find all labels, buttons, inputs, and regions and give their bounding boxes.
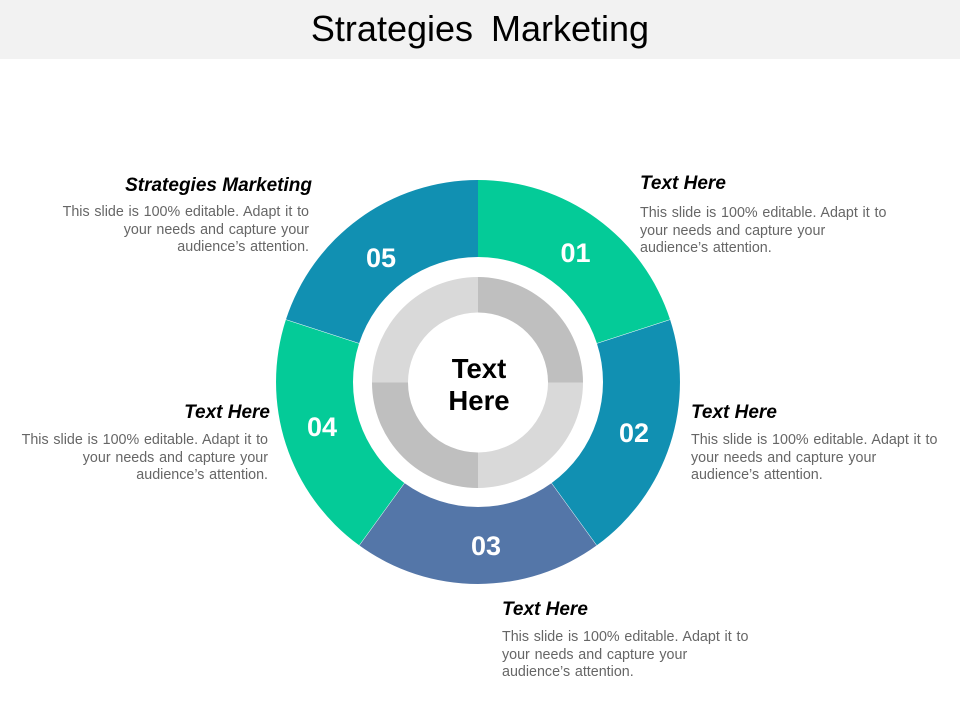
segment 01 xyxy=(478,180,670,343)
center label: Text xyxy=(452,353,506,384)
text block 03: audience’s attention. xyxy=(502,664,634,680)
text block 01 xyxy=(640,173,886,256)
inner ring xyxy=(372,277,583,488)
center label: Here xyxy=(448,385,510,416)
text block 01: audience’s attention. xyxy=(640,240,772,256)
text block 03 xyxy=(502,599,748,680)
text block 03: your needs and capture your xyxy=(502,647,687,663)
text block 02: Text Here xyxy=(691,402,777,423)
text block 05 xyxy=(62,175,312,255)
segment 03: 03 xyxy=(471,531,501,561)
segment 04: 04 xyxy=(307,412,337,442)
segment 05 xyxy=(286,180,478,343)
text block 05: your needs and capture your xyxy=(124,222,309,238)
segment 01: 01 xyxy=(560,238,591,268)
text block 05: audience’s attention. xyxy=(177,239,309,255)
segment 02: 02 xyxy=(619,418,649,448)
text block 02: your needs and capture your xyxy=(691,450,876,466)
text block 04: your needs and capture your xyxy=(83,450,268,466)
segment 04 xyxy=(276,320,404,545)
text block 01: This slide is 100% editable. Adapt it to xyxy=(640,205,886,221)
text block 01: your needs and capture your xyxy=(640,223,825,239)
segment 05: 05 xyxy=(366,243,396,273)
center label xyxy=(448,353,510,416)
text block 04 xyxy=(22,402,270,483)
title bar xyxy=(0,0,960,59)
text block 05: This slide is 100% editable. Adapt it to xyxy=(63,204,309,220)
text block 04: Text Here xyxy=(184,402,270,423)
title: Strategies Marketing xyxy=(311,8,649,49)
segment 02 xyxy=(552,320,680,545)
text block 03: Text Here xyxy=(502,599,588,620)
text block 02 xyxy=(691,402,937,483)
text block 02: audience’s attention. xyxy=(691,467,823,483)
text block 04: This slide is 100% editable. Adapt it to xyxy=(22,432,268,448)
segment 03 xyxy=(359,483,597,584)
text block 03: This slide is 100% editable. Adapt it to xyxy=(502,629,748,645)
text block 04: audience’s attention. xyxy=(136,467,268,483)
text block 02: This slide is 100% editable. Adapt it to xyxy=(691,432,937,448)
text block 01: Text Here xyxy=(640,173,726,194)
text block 05: Strategies Marketing xyxy=(125,175,312,196)
